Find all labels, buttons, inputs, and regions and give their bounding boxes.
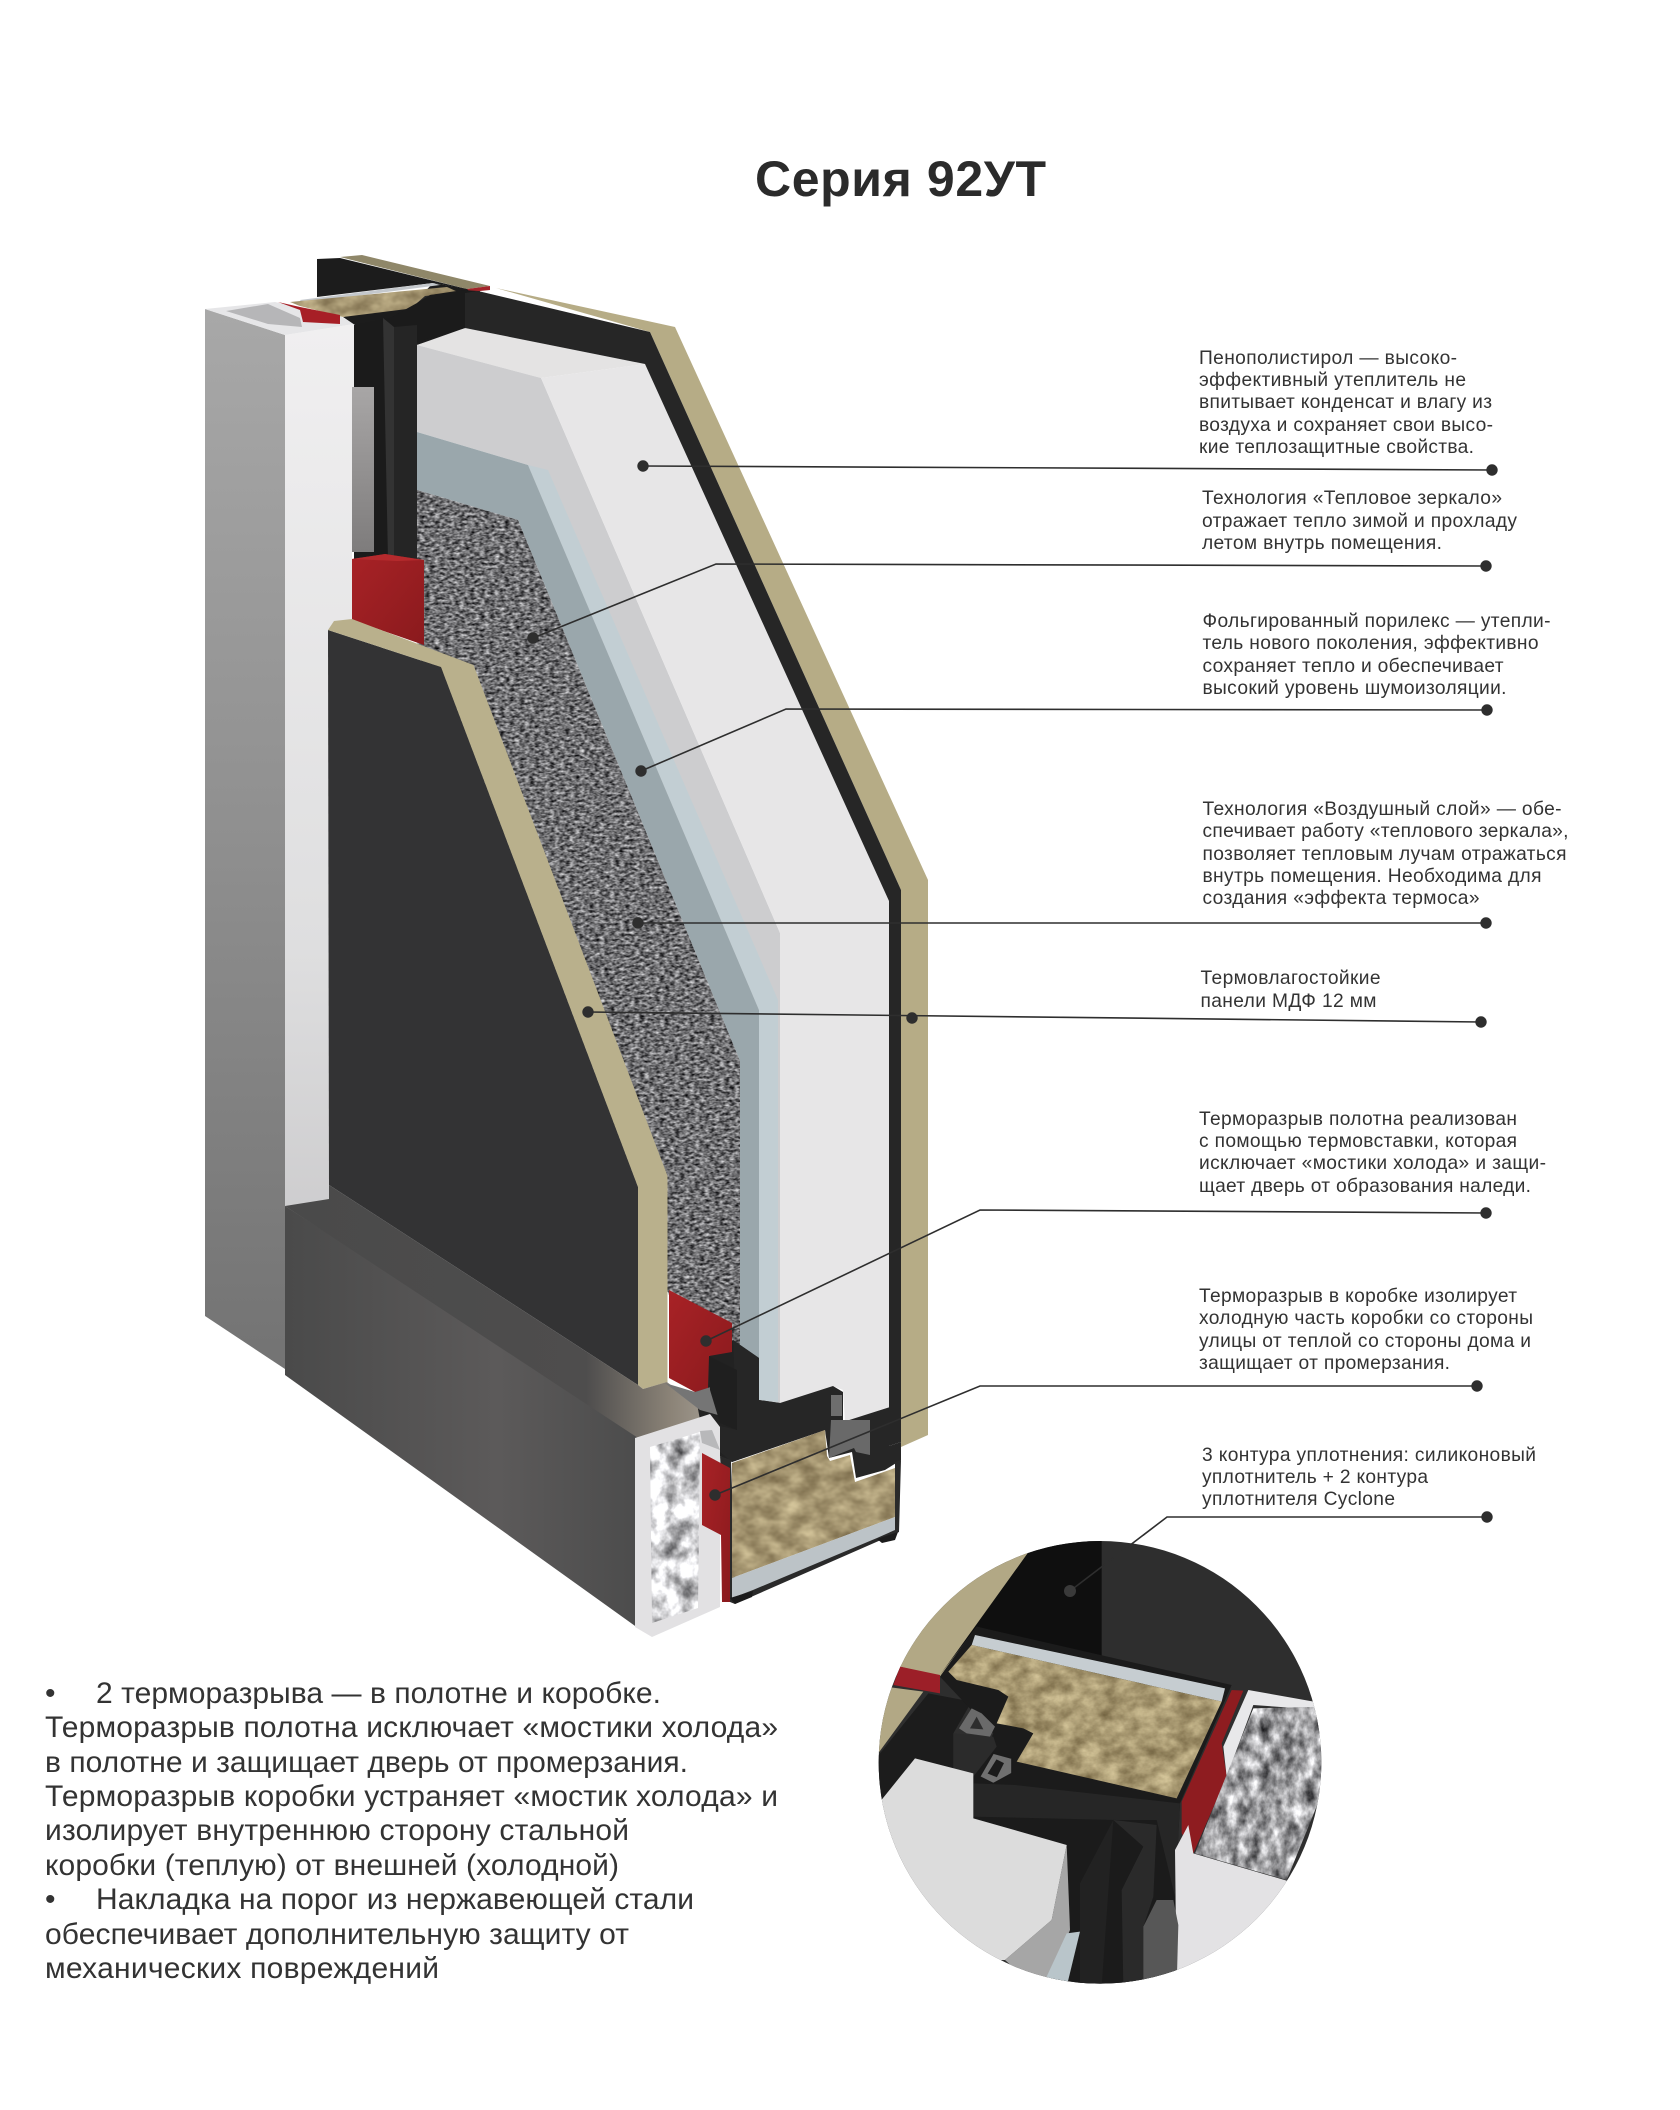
title: Серия 92УТ [755,151,1046,207]
label: frame thermal break: холодную часть коробки со стороны [1199,1308,1533,1329]
bottom text block: механических повреждений [45,1952,439,1985]
label: air layer [1202,799,1568,909]
white PVC frame end [635,1414,720,1637]
callout: MDF panels [582,1006,1487,1028]
foam top face [417,328,645,378]
mineral wool section [732,1430,895,1578]
label: thermal mirror: Технология «Тепловое зеркало» [1202,488,1502,509]
foam strip under wool [732,1517,895,1598]
foam side face [417,345,780,1403]
label: thermal mirror [1202,488,1517,554]
callout: foil porilex [635,704,1493,777]
label: MDF: панели МДФ 12 мм [1200,991,1376,1012]
label: seals: уплотнителя Cyclone [1202,1489,1395,1510]
black insert piece [720,1340,901,1478]
label: air layer: внутрь помещения. Необходима для [1202,866,1542,887]
foil on frame top [226,304,302,327]
rear MDF panel [496,288,928,1447]
bottom text block: • [45,1883,56,1916]
label: foam: Пенополистирол — высоко- [1199,348,1457,369]
bottom text block: Терморазрыв коробки устраняет «мостик холода» и [45,1780,778,1813]
black steel inner [940,1537,1102,1675]
threshold steel front face [285,1206,638,1628]
label: seals: уплотнитель + 2 контура [1202,1467,1428,1488]
white PVC frame upper [1223,1690,1323,1777]
callout: seal contours [1064,1511,1493,1597]
label: MDF: Термовлагостойкие [1200,968,1380,989]
rear top black profile [317,258,467,297]
label: thermal mirror: отражает тепло зимой и прохладу [1202,511,1517,532]
black profile block top [354,290,478,560]
label: frame thermal break: защищает от промерзания. [1199,1353,1450,1374]
feet of profile [730,1591,753,1604]
label: air layer: позволяет тепловым лучам отражаться [1202,844,1566,865]
label: air layer: создания «эффекта термоса» [1202,888,1480,909]
blue strip in circle [1047,1932,1080,1987]
small red insert top [467,286,490,292]
callout: foam insulation [637,460,1498,476]
bottom text block: коробки (теплую) от внешней (холодной) [45,1849,619,1882]
dark profile under upper seal [974,1736,996,1776]
callout: air layer [632,917,1492,929]
bottom text block: • [45,1677,56,1710]
wool in circle [948,1645,1222,1798]
label: frame thermal break: улицы от теплой со стороны дома и [1199,1331,1531,1352]
black block behind top section [343,283,480,345]
label: porilex: высокий уровень шумоизоляции. [1202,678,1506,699]
label: seals: 3 контура уплотнения: силиконовый [1202,1445,1536,1466]
bottom text block: Терморазрыв полотна исключает «мостики холода» [45,1711,778,1744]
label: seals [1202,1445,1536,1510]
grey channel [700,1430,720,1450]
door frame outer grey face [205,309,285,1369]
label: porilex: тель нового поколения, эффективно [1202,633,1538,654]
label: MDF [1200,968,1380,1012]
red thermal break in frame [702,1453,730,1602]
black main profile [940,1627,1232,1987]
cyclone seal upper [959,1708,995,1737]
label: frame thermal break: Терморазрыв в коробке изолирует [1199,1286,1517,1307]
label: air layer: спечивает работу «теплового зеркала», [1202,821,1568,842]
label: porilex [1202,611,1550,699]
upper red thermal insert [352,554,424,645]
foil filling [650,1432,700,1623]
front MDF edge [328,619,668,1389]
red thermal break in frame top [278,302,340,324]
bottom text block: Накладка на порог из нержавеющей стали [96,1883,694,1916]
black steel layer [463,291,901,1446]
tan panel upper [900,1553,1028,1676]
label: foam: эффективный утеплитель не [1199,370,1466,391]
foam top in circle [873,1758,1067,1960]
label: thermal mirror: летом внутрь помещения. [1202,533,1442,554]
frame top cap [205,302,354,335]
circle background panel [877,1537,1323,1987]
label: frame thermal break [1199,1286,1533,1374]
label: porilex: сохраняет тепло и обеспечивает [1202,656,1504,677]
door cross-section illustration [205,255,928,1637]
label: leaf thermal break: Терморазрыв полотна реализован [1199,1109,1517,1130]
air layer strip [528,465,778,1402]
foam front face [541,364,889,1422]
rear top MDF edge [340,255,490,289]
detail circle: three seal contours [873,1533,1323,1987]
air layer teal surface [417,432,759,1400]
grey seal in section [829,1420,870,1458]
dark backdrop behind section [695,1340,825,1462]
bottom text block [45,1677,778,1985]
lower red thermal insert [669,1290,732,1392]
label: air layer: Технология «Воздушный слой» — обе- [1202,799,1562,820]
thin foam strip on top [300,283,440,303]
callout: frame thermal break [709,1380,1483,1501]
bottom text block: 2 терморазрыва — в полотне и коробке. [96,1677,661,1710]
black left section [878,1694,968,1800]
label: foam [1199,348,1493,458]
grey seal strip [352,387,374,552]
bottom text block: изолирует внутреннюю сторону стальной [45,1814,629,1847]
tan panel lower [878,1688,924,1752]
label: leaf thermal break: с помощью термовставки, которая [1199,1131,1517,1152]
black seal profile top [417,292,462,308]
label: foam: впитывает конденсат и влагу из [1199,392,1492,413]
foil in circle [1195,1707,1323,1880]
label: leaf thermal break: исключает «мостики холода» и защи- [1199,1153,1546,1174]
red insert in circle [893,1667,940,1693]
label: foam: воздуха и сохраняет свои высо- [1199,415,1493,436]
slim seal lower in circle [1143,1900,1178,1987]
label: leaf thermal break [1199,1109,1546,1197]
door frame white face [285,324,354,1369]
label: leaf thermal break: щает дверь от образования наледи. [1199,1176,1531,1197]
threshold steel top face [285,1185,715,1438]
bottom text block: в полотне и защищает дверь от промерзания. [45,1746,688,1779]
callout: door leaf thermal break [700,1207,1492,1347]
label: porilex: Фольгированный порилекс — утепли- [1202,611,1550,632]
label: foam: кие теплозащитные свойства. [1199,437,1474,458]
cyclone seal lower [980,1753,1012,1783]
red thermal break in circle [1182,1690,1243,1853]
callout: thermal mirror [527,560,1492,644]
bottom text block: обеспечивает дополнительную защиту от [45,1918,629,1951]
foil porilex layer [417,490,740,1350]
black profile light face [394,325,417,560]
foam side in circle [1005,1845,1070,1987]
front panel dark face [328,630,638,1385]
strip foam in circle [972,1635,1225,1702]
white PVC frame lower [1175,1825,1287,1970]
mineral wool in frame top [290,287,458,317]
metal outer rim [720,1456,901,1604]
grey seal at threshold [665,1383,718,1415]
